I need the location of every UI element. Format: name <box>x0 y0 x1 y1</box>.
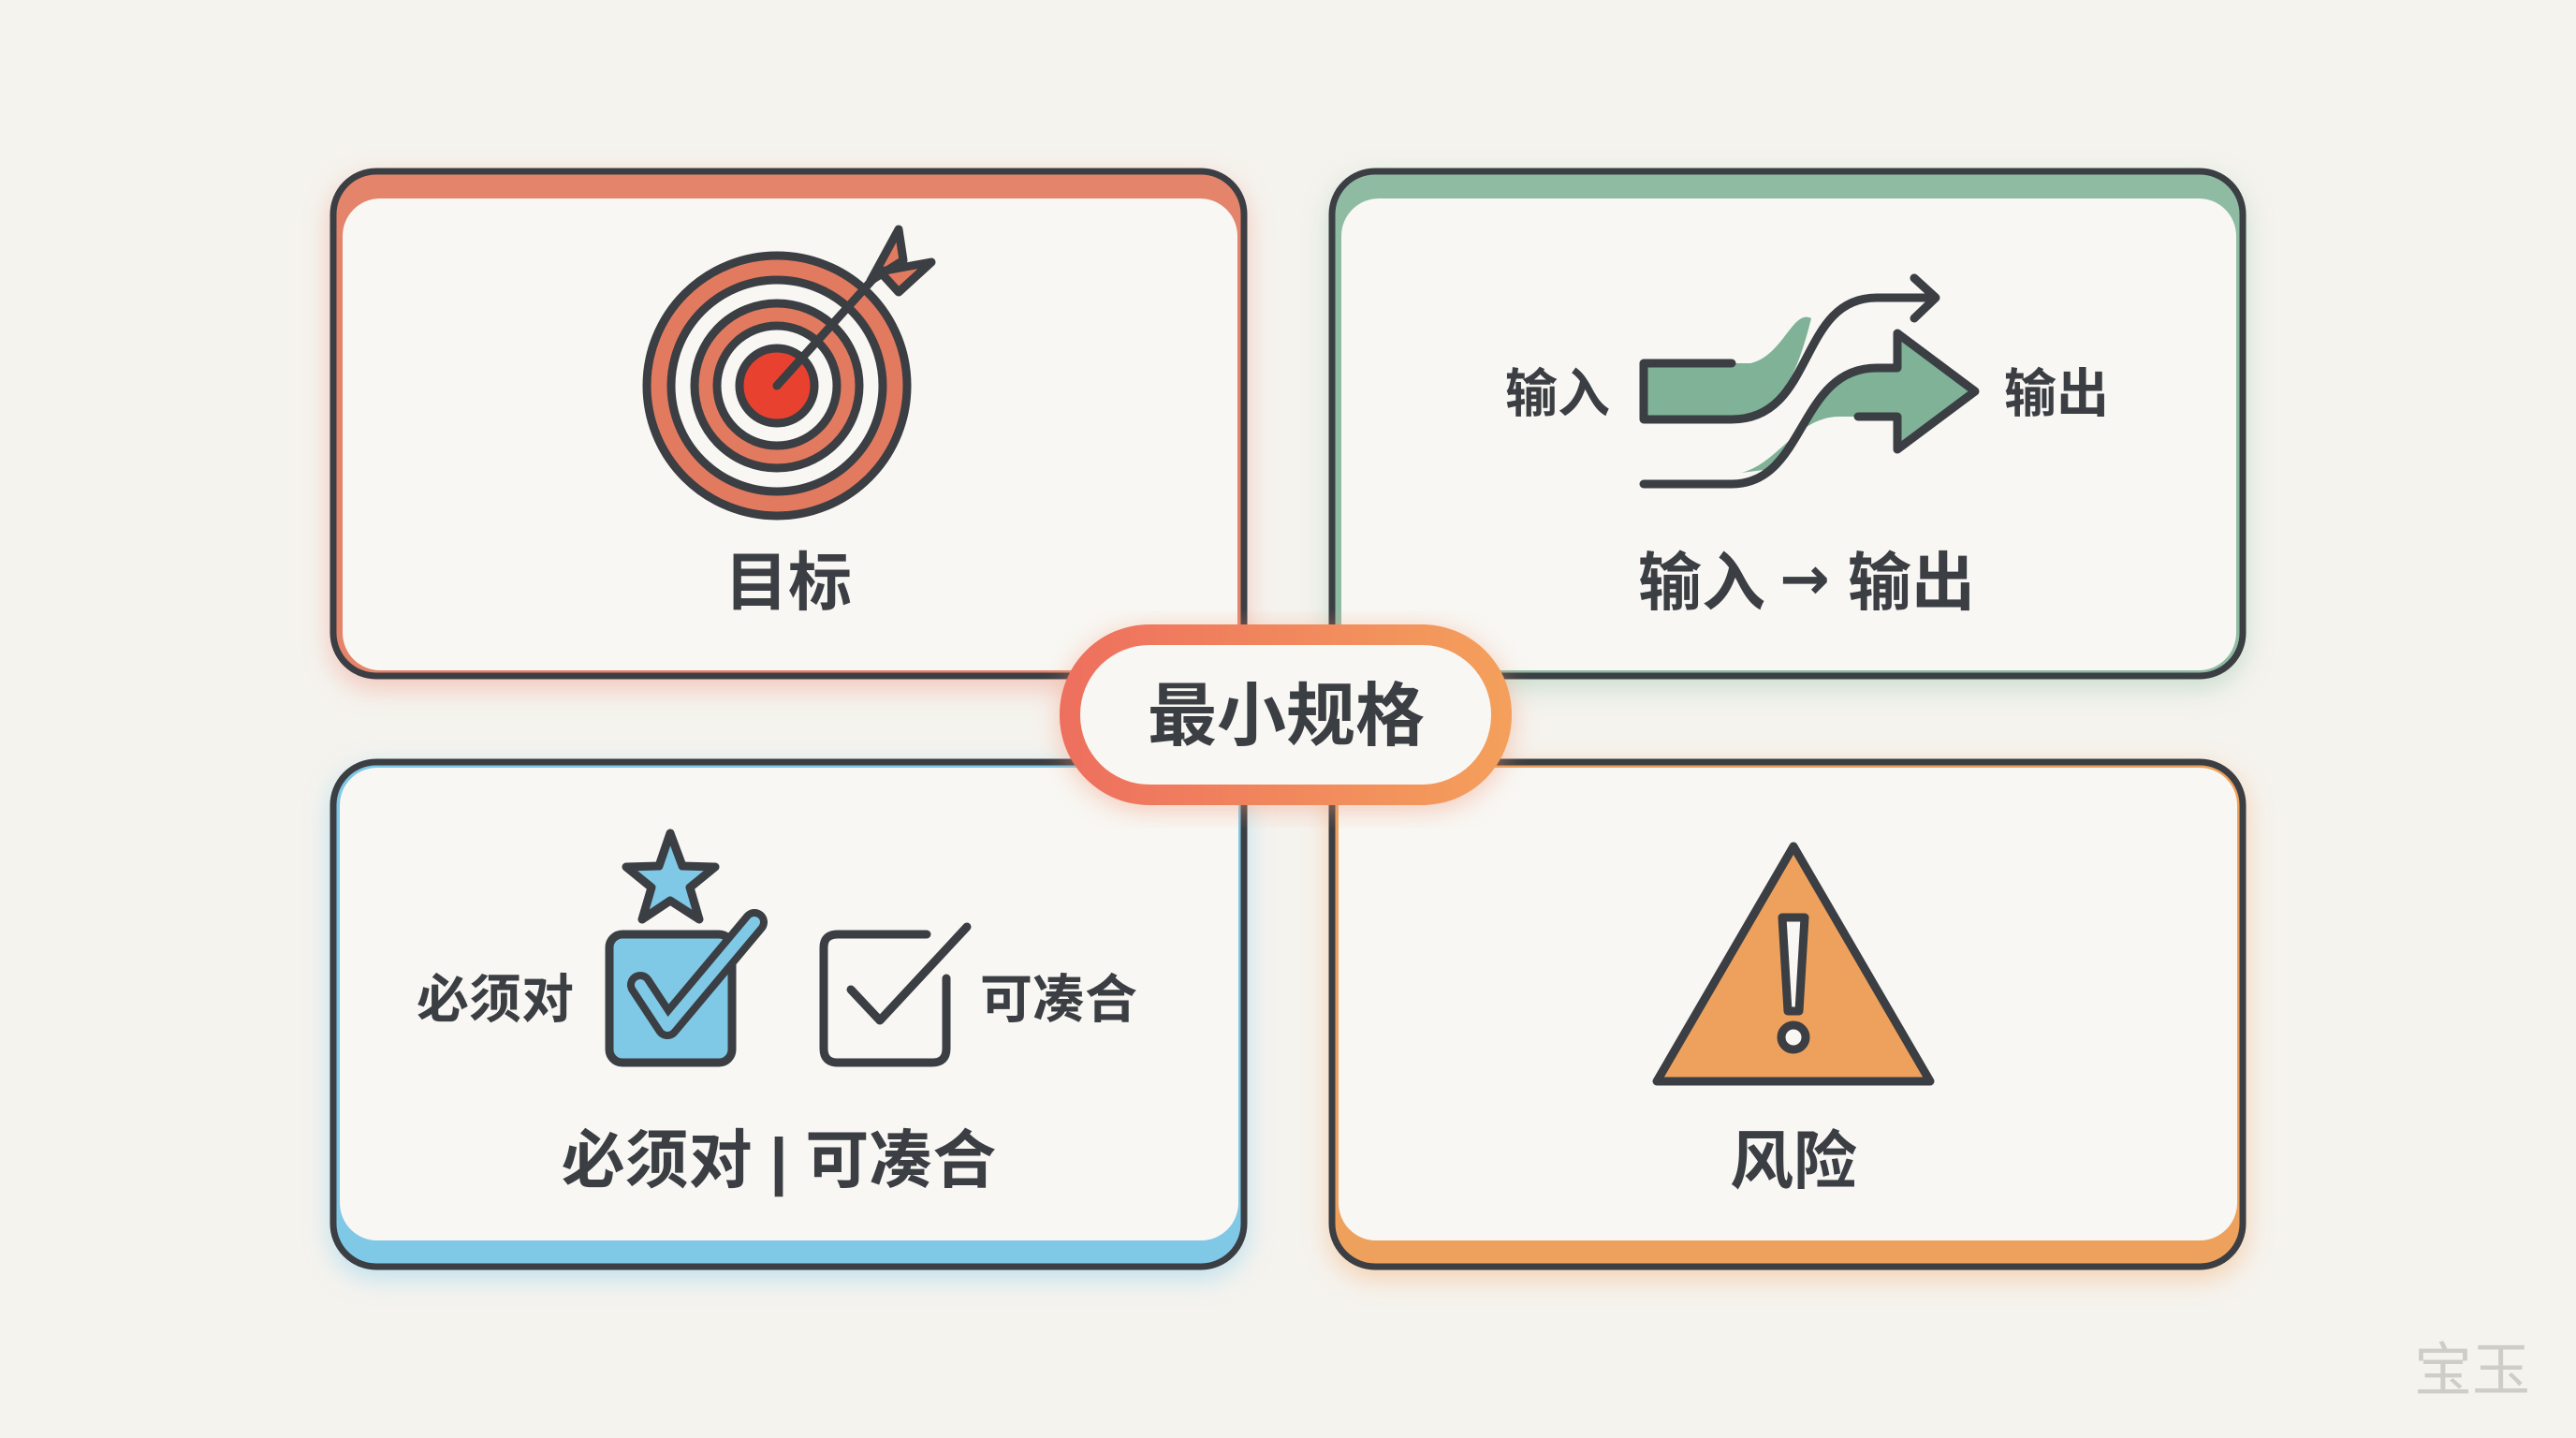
label: input to output <box>1638 545 1975 619</box>
center pill: 最小规格 <box>1148 677 1425 755</box>
label: goal: 目标 <box>724 548 852 619</box>
watermark: 宝玉 <box>2414 1339 2530 1403</box>
center pill <box>1060 624 1512 810</box>
panel: input-output <box>1329 171 2246 688</box>
icon: target <box>647 229 931 516</box>
icon: checked box <box>609 922 754 1063</box>
icon: flow arrows <box>1644 278 1975 484</box>
panel: goal <box>330 171 1247 688</box>
panel: risk <box>1329 762 2246 1278</box>
label: ok: 可凑合 <box>980 970 1137 1029</box>
label: risk: 风险 <box>1730 1126 1857 1197</box>
label: input to output: 输入 <box>1638 548 1765 619</box>
label: must | ok: 必须对 | 可凑合 <box>562 1125 996 1197</box>
panel: must vs ok <box>330 762 1247 1278</box>
label: must: 必须对 <box>417 970 574 1029</box>
icon: open check box <box>824 927 967 1063</box>
icon: star <box>626 833 715 919</box>
label: input: 输入 <box>1505 364 1610 423</box>
icon: warning <box>1657 846 1930 1081</box>
label: input to output: → <box>1779 545 1830 614</box>
label: output: 输出 <box>2004 364 2109 423</box>
label: input to output: 输出 <box>1848 548 1975 619</box>
